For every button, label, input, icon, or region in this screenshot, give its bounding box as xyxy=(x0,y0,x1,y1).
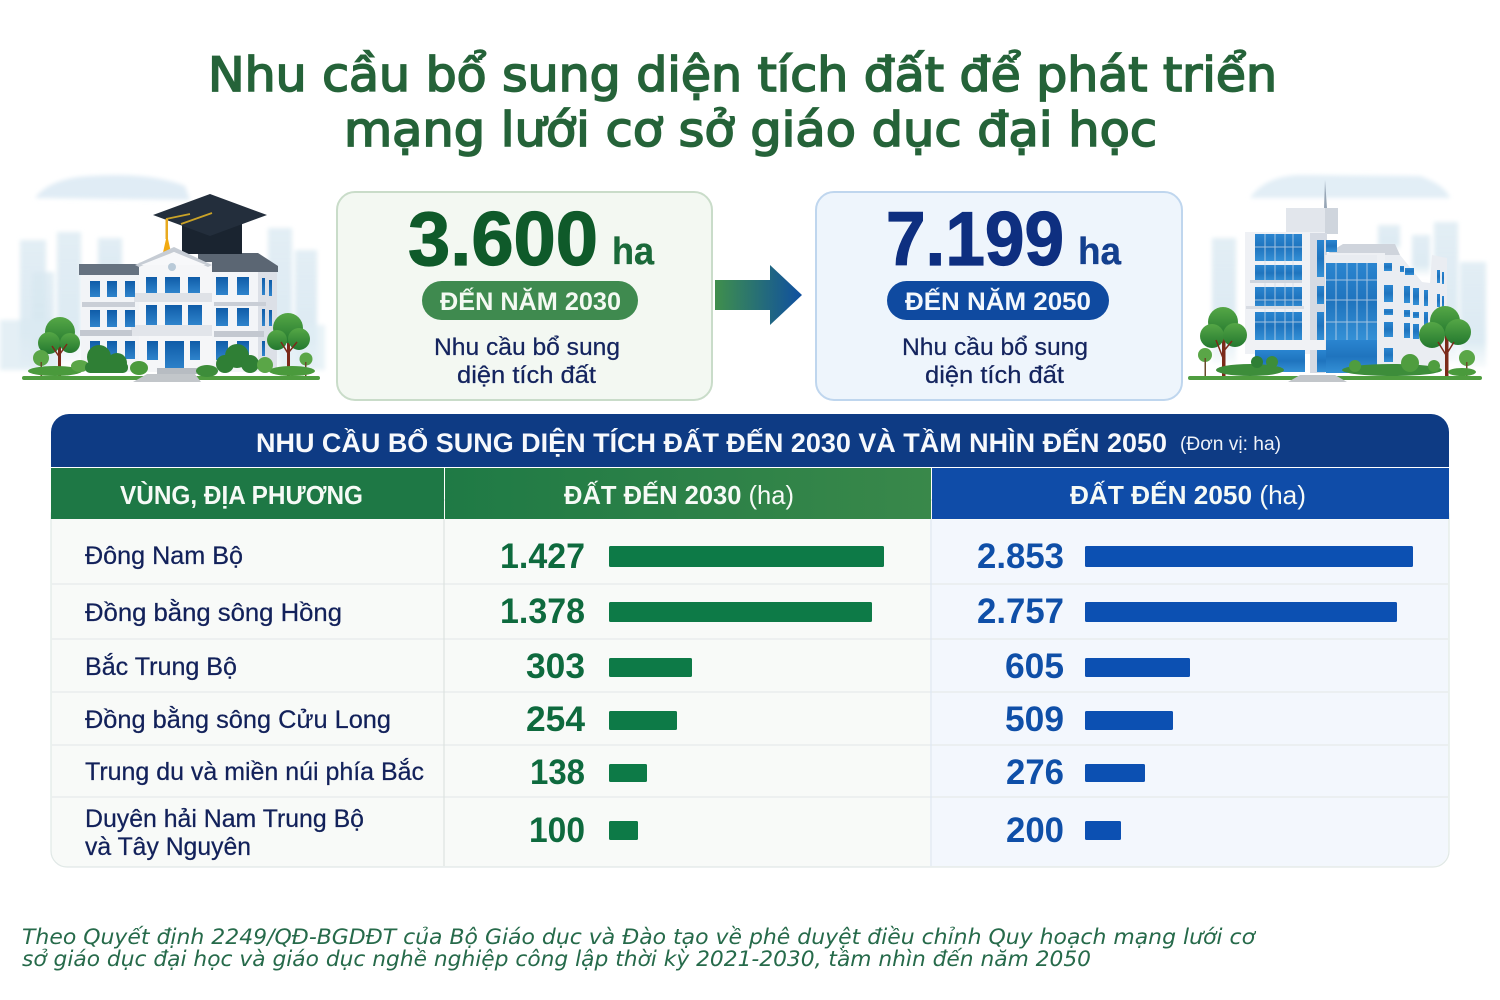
table heading bar: (Đơn vị: ha) xyxy=(1180,434,1281,455)
pill: đến năm 2030 xyxy=(422,281,638,320)
illustration: modern office building xyxy=(1188,175,1486,382)
title: Nhu cầu bổ sung diện tích đất để phát triển xyxy=(208,48,1277,103)
column headers: ĐẤT ĐẾN 2030 (ha) xyxy=(564,480,794,510)
column: land to 2030 values and bars: 1.378 xyxy=(500,592,585,631)
trees and shrubs xyxy=(1198,306,1476,376)
description: diện tích đất xyxy=(925,362,1064,389)
spire and top block xyxy=(1324,180,1327,208)
table heading bar xyxy=(51,414,1449,467)
column: land to 2030 values and bars: 1.427 xyxy=(500,537,585,576)
description: diện tích đất xyxy=(457,362,596,389)
table heading bar: NHU CẦU BỔ SUNG DIỆN TÍCH ĐẤT ĐẾN 2030 VÀ TẦM NHÌN ĐẾN 2050 xyxy=(256,427,1167,458)
source note: Theo Quyết định 2249/QĐ-BGDĐT của Bộ Giáo dục và Đào tạo về phê duyệt điều chỉnh Quy hoạch mạng lưới cơ xyxy=(22,925,1256,949)
arrow xyxy=(715,265,802,325)
column: land to 2050 values and bars: 509 xyxy=(1005,700,1064,739)
column: land to 2050 values and bars xyxy=(977,537,1413,850)
column: land to 2030 values and bars: 303 xyxy=(526,647,585,686)
glass xyxy=(1255,234,1444,373)
card: 3.600 ha by 2030 xyxy=(337,192,712,400)
pill: đến năm 2050 xyxy=(887,281,1109,320)
description xyxy=(902,334,1088,389)
graduation cap xyxy=(153,194,267,257)
column: land to 2030 values and bars: 138 xyxy=(530,753,585,792)
card: 7.199 ha by 2050 xyxy=(816,192,1182,400)
column: land to 2050 values and bars: 200 xyxy=(1006,811,1064,850)
title xyxy=(208,48,1277,158)
column headers xyxy=(51,468,1449,519)
right wing xyxy=(1377,253,1447,372)
main tower xyxy=(1245,232,1325,354)
region labels: và Tây Nguyên xyxy=(85,833,251,861)
column: land to 2030 values and bars xyxy=(500,537,884,850)
table body background xyxy=(51,500,1449,867)
description xyxy=(434,334,620,389)
building wings xyxy=(81,272,141,372)
column: land to 2050 values and bars: 2.757 xyxy=(977,592,1064,631)
pill: đến năm 2050: ĐẾN NĂM 2050 xyxy=(905,287,1091,316)
column: land to 2050 values and bars: 605 xyxy=(1005,647,1064,686)
column: land to 2050 values and bars: 2.853 xyxy=(977,537,1064,576)
region labels: Bắc Trung Bộ xyxy=(85,652,237,681)
region labels: Trung du và miền núi phía Bắc xyxy=(85,757,424,786)
pill: đến năm 2030: ĐẾN NĂM 2030 xyxy=(440,287,621,316)
region labels: Đồng bằng sông Hồng xyxy=(85,598,342,627)
windows xyxy=(90,277,272,371)
column: land to 2030 values and bars: 100 xyxy=(529,811,585,850)
region labels: Đồng bằng sông Cửu Long xyxy=(85,705,391,734)
description: Nhu cầu bổ sung xyxy=(902,334,1088,361)
value: 3.600 ha: ha xyxy=(612,231,655,273)
description: Nhu cầu bổ sung xyxy=(434,334,620,361)
trees and shrubs xyxy=(28,313,315,377)
value: 3.600 ha: 3.600 xyxy=(408,197,598,282)
title: mạng lưới cơ sở giáo dục đại học xyxy=(344,103,1157,158)
region labels: Duyên hải Nam Trung Bộ xyxy=(85,805,364,833)
column headers: VÙNG, ĐỊA PHƯƠNG xyxy=(120,480,363,510)
source note xyxy=(22,925,1256,971)
column: land to 2030 values and bars: 254 xyxy=(526,700,586,739)
illustration: university building with graduation cap xyxy=(0,175,325,382)
region labels: Đông Nam Bộ xyxy=(85,542,243,570)
floor lines xyxy=(1255,234,1377,340)
centre block xyxy=(139,262,212,372)
column: land to 2050 values and bars: 276 xyxy=(1006,753,1064,792)
value: 7.199 ha: 7.199 xyxy=(886,197,1064,282)
column headers: ĐẤT ĐẾN 2050 (ha) xyxy=(1070,480,1306,510)
table panel xyxy=(51,414,1449,867)
region labels xyxy=(85,542,424,861)
source note: sở giáo dục đại học và giáo dục nghề nghiệp công lập thời kỳ 2021-2030, tầm nhìn đến năm 2050 xyxy=(22,947,1091,971)
value: 7.199 ha: ha xyxy=(1078,231,1122,273)
